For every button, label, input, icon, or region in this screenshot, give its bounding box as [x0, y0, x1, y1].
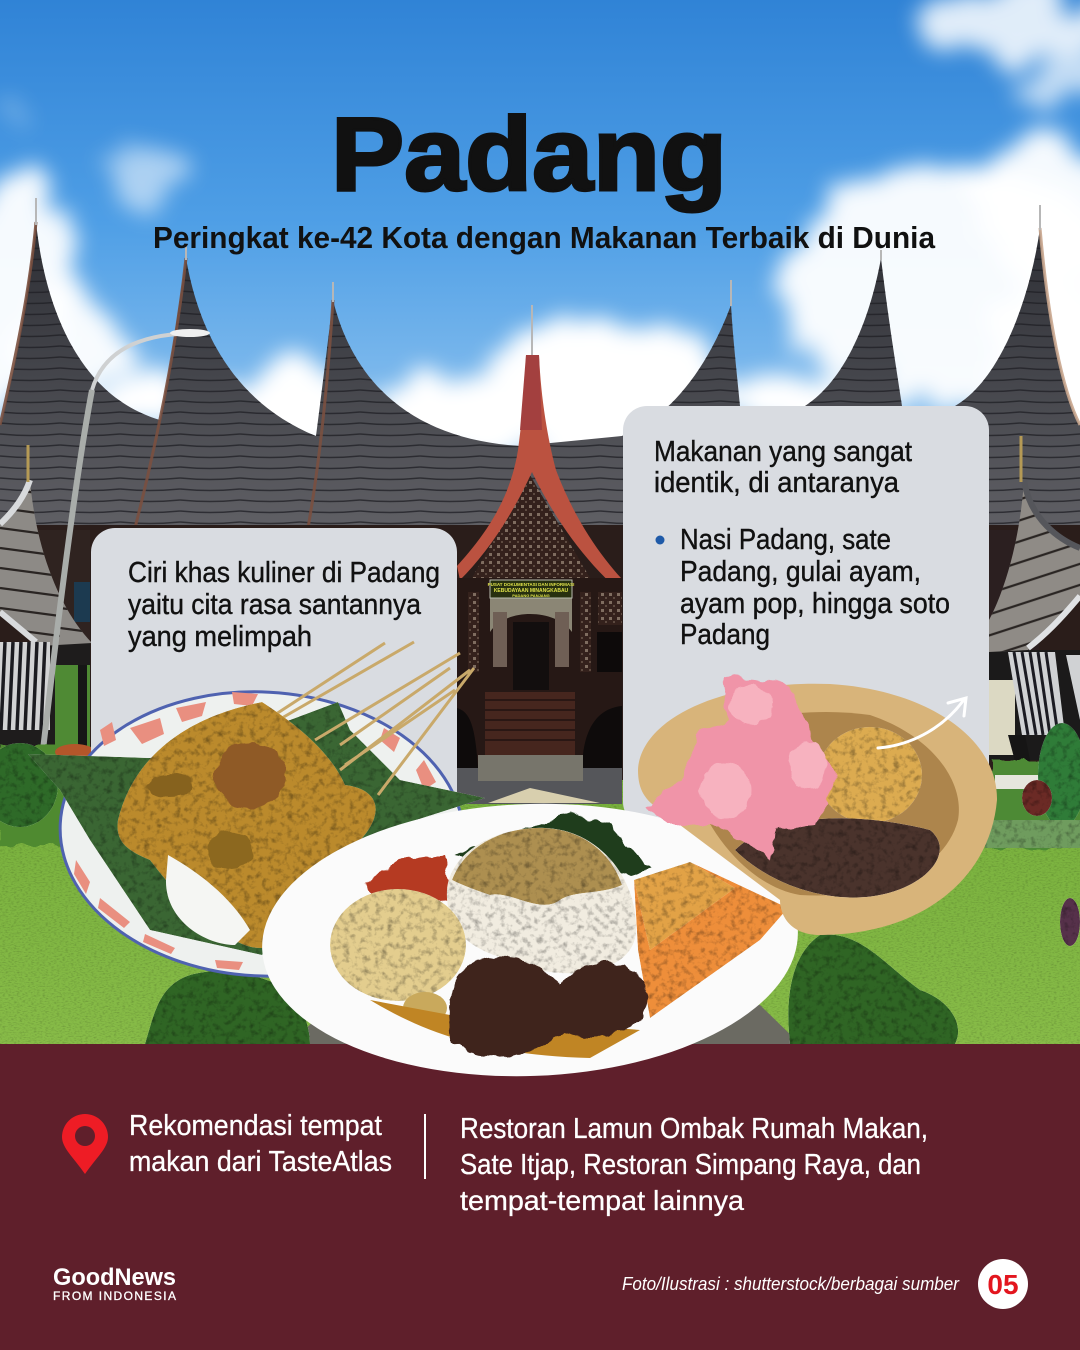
- center facade: [457, 578, 622, 804]
- text: recommendation label: [129, 1110, 392, 1178]
- text: right panel: Nasi Padang, sate: [680, 524, 891, 556]
- text: recommended restaurants: tempat-tempat lainnya: [460, 1185, 744, 1216]
- text: left panel: yaitu cita rasa santannya: [128, 589, 422, 621]
- panel: left: [91, 528, 457, 858]
- text: right panel: ayam pop, hingga soto: [680, 588, 950, 620]
- panel: right: [623, 406, 989, 826]
- text: recommendation label: makan dari TasteAtlas: [129, 1146, 392, 1178]
- icon: location pin: [62, 1114, 108, 1174]
- text: recommended restaurants: Sate Itjap, Restoran Simpang Raya, dan: [460, 1149, 921, 1181]
- logo: GoodNews: GoodNews: [53, 1264, 176, 1291]
- right annex: [989, 436, 1080, 780]
- food: sate padang plate: [28, 642, 485, 986]
- logo: GoodNews: FROM INDONESIA: [53, 1289, 176, 1303]
- food: nasi padang plate: [257, 795, 803, 1085]
- building: Rumah Gadang: [0, 198, 1080, 804]
- street lamp: [43, 329, 210, 750]
- sky background: [0, 0, 1080, 560]
- subtitle: Peringkat ke-42 Kota dengan Makanan Terbaik di Dunia: [153, 220, 936, 255]
- center gable: [457, 355, 621, 588]
- page number: 05: [987, 1269, 1019, 1300]
- page number: [978, 1259, 1028, 1309]
- text: left panel: yang melimpah: [128, 621, 312, 653]
- plaque: KEBUDAYAAN MINANGKABAU: [494, 588, 569, 594]
- lawn: [0, 780, 1080, 1050]
- plaque: [488, 580, 574, 598]
- text: right panel: Makanan yang sangat: [654, 436, 912, 468]
- roof silhouette: [0, 222, 1080, 560]
- left annex: [0, 445, 92, 752]
- title: Padang: [331, 97, 727, 213]
- text: left panel: [128, 557, 440, 653]
- text: right panel: Padang: [680, 619, 770, 651]
- text: recommended restaurants: [460, 1113, 928, 1216]
- plaque: PADANG PANJANG: [512, 593, 550, 598]
- text: right panel: identik, di antaranya: [654, 467, 900, 499]
- food: soto bowl: [638, 675, 997, 935]
- photo credit: Foto/Ilustrasi : shutterstock/berbagai sumber: [622, 1274, 960, 1294]
- text: right panel: [654, 436, 950, 651]
- garden shrubs: [0, 723, 1080, 1044]
- text: right panel: Padang, gulai ayam,: [680, 556, 921, 588]
- text: recommended restaurants: Restoran Lamun Ombak Rumah Makan,: [460, 1113, 928, 1145]
- wall: [0, 525, 1080, 780]
- bottom band: [0, 1044, 1080, 1350]
- plaque: PUSAT DOKUMENTASI DAN INFORMASI: [488, 582, 574, 587]
- arrow: [878, 698, 966, 748]
- text: recommendation label: Rekomendasi tempat: [129, 1110, 382, 1142]
- logo: GoodNews: [53, 1264, 176, 1303]
- text: left panel: Ciri khas kuliner di Padang: [128, 557, 440, 589]
